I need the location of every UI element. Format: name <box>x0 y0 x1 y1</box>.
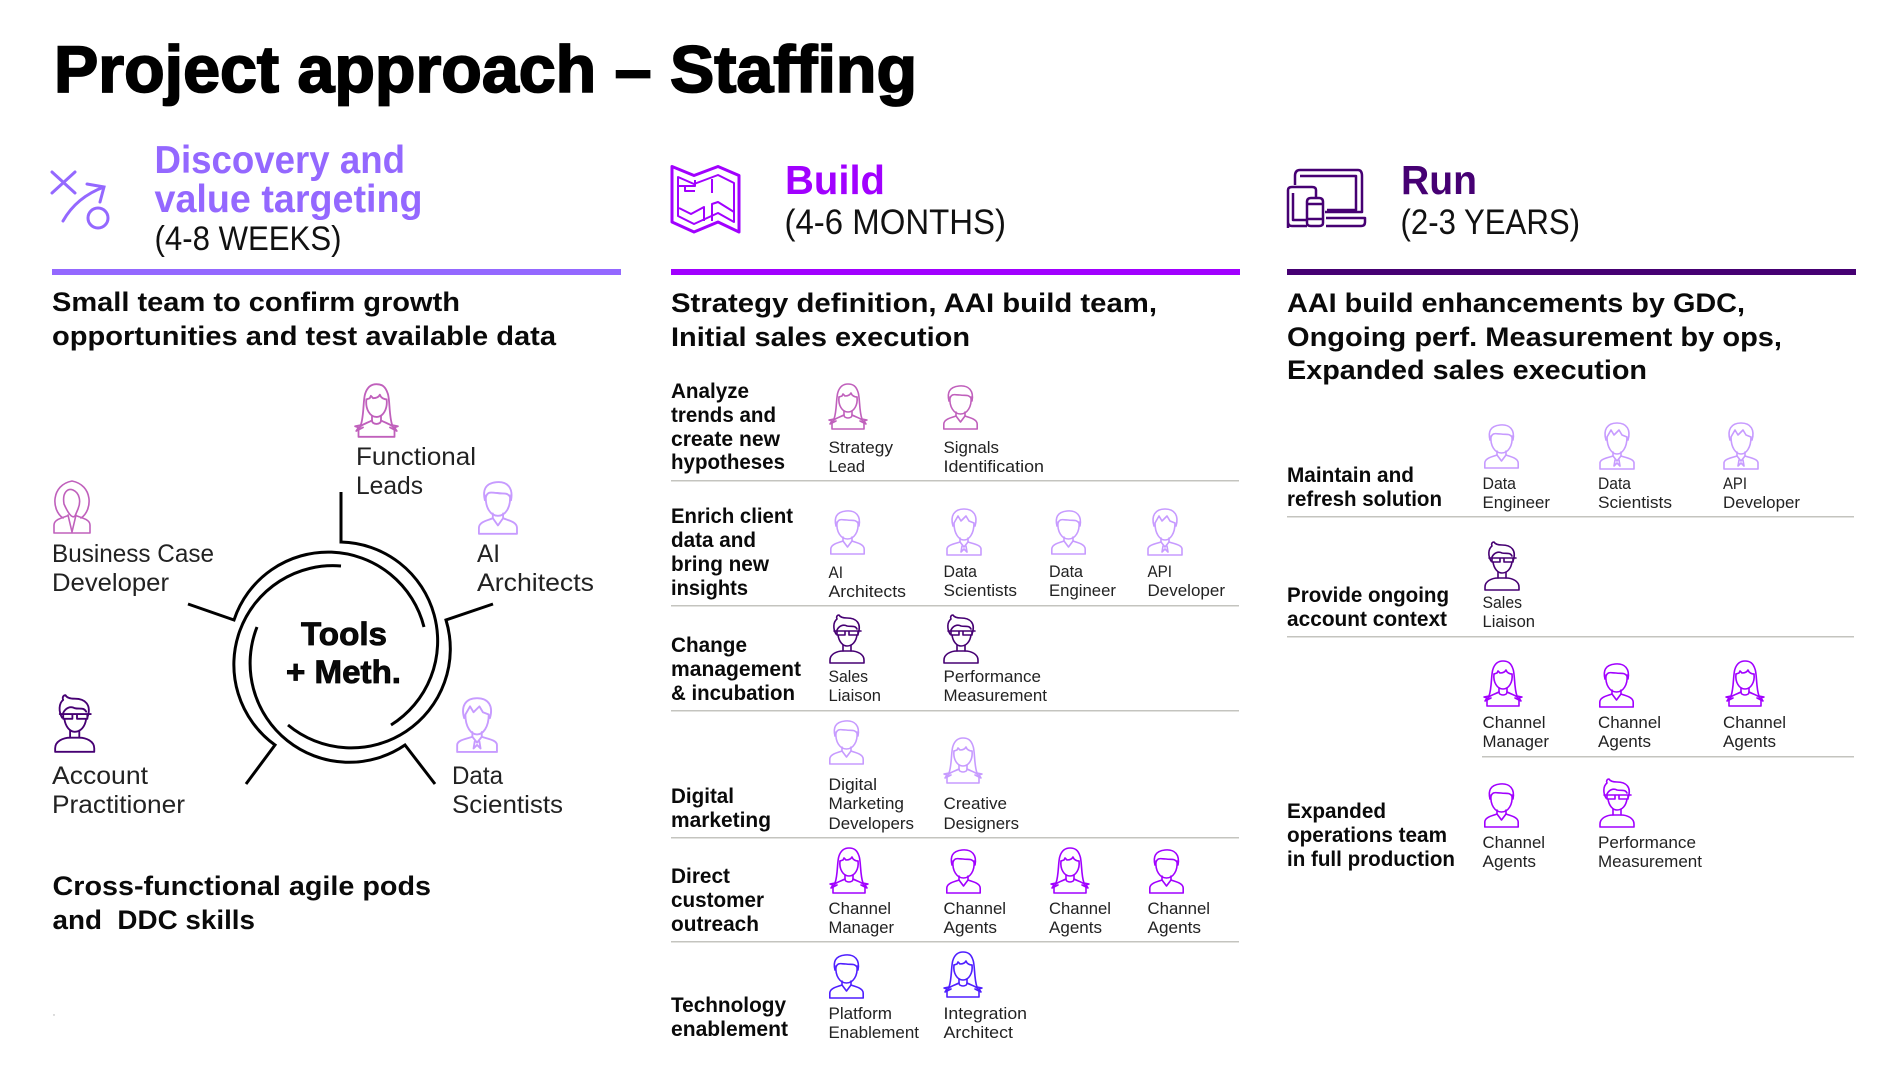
center label: Tools <box>301 616 387 652</box>
row label <box>1287 800 1455 871</box>
icon: play diagram <box>52 172 108 228</box>
role: channel manager <box>828 848 894 937</box>
role: performance measurement: Measurement <box>944 686 1047 705</box>
panel: build <box>671 157 1240 1042</box>
label: Functional <box>356 443 476 471</box>
role: channel agents <box>1598 664 1661 751</box>
row: digital marketing <box>671 721 1019 833</box>
row label: Change <box>671 634 747 657</box>
role: data engineer: Engineer <box>1049 581 1116 600</box>
role: platform enablement: Enablement <box>828 1023 919 1042</box>
role: channel agents: Channel <box>944 899 1006 918</box>
role: channel agents: Agents <box>944 918 997 937</box>
label: AI <box>477 540 500 568</box>
role: channel agents <box>1148 850 1210 937</box>
row label <box>671 785 771 832</box>
role: channel manager: Channel <box>1482 713 1546 732</box>
heading: build: (4-6 MONTHS) <box>784 203 1006 242</box>
row label: Analyze <box>671 380 749 403</box>
role: channel agents: Agents <box>1723 732 1776 751</box>
role: signals identification <box>944 386 1044 476</box>
summary text <box>1287 288 1782 385</box>
role: API developer: Developer <box>1148 581 1225 600</box>
role: API developer <box>1723 423 1800 512</box>
row label: Provide ongoing <box>1287 584 1449 607</box>
role: data scientists <box>452 698 563 819</box>
row label: bring new <box>671 553 770 576</box>
label <box>52 540 214 597</box>
footer text <box>52 871 431 935</box>
row label <box>671 994 788 1041</box>
role: sales liaison: Sales <box>1482 593 1522 612</box>
row label: marketing <box>671 809 771 832</box>
role: digital marketing developers: Marketing <box>828 794 904 813</box>
role: API developer <box>1148 509 1225 600</box>
role: channel agents: Agents <box>1598 732 1651 751</box>
role: functional leads <box>355 384 476 500</box>
icon: man with glasses <box>55 695 94 752</box>
summary text <box>671 288 1157 352</box>
row: analyze trends <box>671 380 1044 476</box>
role: channel agents: Agents <box>1482 852 1536 871</box>
role: strategy lead: Lead <box>828 457 865 476</box>
row label: operations team <box>1287 824 1447 847</box>
row: change management <box>671 615 1047 705</box>
summary text <box>52 287 557 351</box>
summary text: Ongoing perf. Measurement by ops, <box>1287 322 1782 352</box>
role: performance measurement <box>944 615 1047 705</box>
role: sales liaison: Sales <box>828 667 868 686</box>
heading: run: Run <box>1401 157 1477 203</box>
role: integration architect: Integration <box>944 1004 1027 1023</box>
row label <box>1287 584 1449 631</box>
role: integration architect <box>944 952 1027 1042</box>
role: strategy lead <box>828 384 894 476</box>
label: Architects <box>477 569 594 597</box>
role: API developer: API <box>1148 562 1172 581</box>
row label: Digital <box>671 785 734 808</box>
row label <box>1287 464 1442 511</box>
footer text: and DDC skills <box>52 905 255 935</box>
icon: map <box>672 166 739 232</box>
row label: Expanded <box>1287 800 1386 823</box>
row label <box>671 865 764 936</box>
heading: build: Build <box>785 157 885 203</box>
role: business case developer <box>52 481 214 597</box>
role: data scientists: Data <box>944 562 977 581</box>
title: Project approach – Staffing <box>54 32 917 106</box>
summary text: opportunities and test available data <box>52 321 557 351</box>
role: integration architect: Architect <box>944 1023 1013 1042</box>
role: performance measurement: Measurement <box>1598 852 1702 871</box>
icon: woman <box>54 481 90 533</box>
role: channel agents: Channel <box>1723 713 1786 732</box>
row label: data and <box>671 529 756 552</box>
role: platform enablement <box>828 955 919 1042</box>
role: sales liaison: Liaison <box>828 686 881 705</box>
label: Leads <box>356 472 423 500</box>
role: AI architects <box>477 482 594 597</box>
role: channel agents <box>1049 848 1111 937</box>
label <box>452 762 563 819</box>
role: signals identification: Signals <box>944 438 999 457</box>
role: digital marketing developers: Digital <box>828 775 877 794</box>
row label <box>671 505 793 600</box>
role: creative designers <box>944 738 1019 833</box>
role: data engineer: Engineer <box>1482 493 1550 512</box>
heading: discovery <box>154 139 422 258</box>
row: technology enablement <box>671 952 1027 1042</box>
label <box>356 443 476 500</box>
summary text: AAI build enhancements by GDC, <box>1287 288 1745 318</box>
row label: trends and <box>671 404 776 427</box>
row label: outreach <box>671 913 759 936</box>
role: performance measurement: Performance <box>1598 833 1696 852</box>
label: Data <box>452 762 503 790</box>
role: channel agents: Agents <box>1148 918 1201 937</box>
row label: customer <box>671 889 764 912</box>
row: enrich client data <box>671 505 1225 601</box>
role: data engineer: Data <box>1049 562 1084 581</box>
label: Developer <box>52 569 169 597</box>
row: expanded operations <box>1287 661 1786 871</box>
label: Practitioner <box>52 791 185 819</box>
role: signals identification: Identification <box>944 457 1044 476</box>
role: channel manager: Channel <box>828 899 891 918</box>
role: data engineer <box>1482 425 1550 512</box>
row label: Direct <box>671 865 730 888</box>
role: data scientists <box>944 509 1017 600</box>
role: API developer: Developer <box>1723 493 1800 512</box>
role: data scientists: Scientists <box>1598 493 1672 512</box>
icon: devices <box>1288 170 1365 228</box>
center label: + Meth. <box>286 654 401 690</box>
row label: Enrich client <box>671 505 793 528</box>
row: ongoing account context <box>1287 542 1535 631</box>
role: API developer: API <box>1723 474 1747 493</box>
row label <box>671 634 801 705</box>
row label: Maintain and <box>1287 464 1414 487</box>
role: strategy lead: Strategy <box>828 438 894 457</box>
role: platform enablement: Platform <box>828 1004 892 1023</box>
panel: discovery and value targeting <box>52 139 621 935</box>
icon: woman <box>355 384 398 437</box>
row label: & incubation <box>671 682 795 705</box>
role: channel agents <box>1723 661 1786 751</box>
row: direct customer outreach <box>671 848 1210 937</box>
role: channel agents <box>1482 784 1545 871</box>
label <box>52 762 185 819</box>
role: data scientists: Data <box>1598 474 1631 493</box>
role: sales liaison <box>1482 542 1535 631</box>
row: maintain and refresh <box>1287 423 1800 512</box>
role: digital marketing developers <box>828 721 914 833</box>
rule <box>52 269 621 275</box>
icon: man with tie <box>457 698 497 752</box>
label: Account <box>52 762 148 790</box>
role: creative designers: Designers <box>944 814 1019 833</box>
role: AI architects <box>828 511 906 601</box>
role: account practitioner <box>52 695 185 819</box>
row label: management <box>671 658 801 681</box>
row label: refresh solution <box>1287 488 1442 511</box>
role: sales liaison: Liaison <box>1482 612 1535 631</box>
role: data scientists <box>1598 423 1672 512</box>
heading: discovery: Discovery and <box>154 139 405 182</box>
role: performance measurement: Performance <box>944 667 1041 686</box>
heading: discovery: (4-8 WEEKS) <box>154 220 342 258</box>
role: digital marketing developers: Developers <box>828 814 914 833</box>
role: data engineer: Data <box>1482 474 1516 493</box>
role: AI architects: Architects <box>828 582 906 601</box>
role: performance measurement <box>1598 779 1702 871</box>
heading: discovery: value targeting <box>154 178 422 221</box>
row label: hypotheses <box>671 451 785 474</box>
summary text: Small team to confirm growth <box>52 287 460 317</box>
summary text: Initial sales execution <box>671 322 970 352</box>
role: channel agents: Channel <box>1598 713 1661 732</box>
role: channel agents: Channel <box>1148 899 1210 918</box>
role: sales liaison <box>828 615 881 705</box>
row label: in full production <box>1287 848 1455 871</box>
summary text: Strategy definition, AAI build team, <box>671 288 1157 318</box>
role: channel manager: Manager <box>828 918 894 937</box>
row label: insights <box>671 577 748 600</box>
row label: Technology <box>671 994 786 1017</box>
summary text: Expanded sales execution <box>1287 355 1647 385</box>
role: channel manager: Manager <box>1482 732 1549 751</box>
role: AI architects: AI <box>828 563 843 582</box>
rule <box>1287 269 1856 275</box>
role: data engineer <box>1049 511 1116 600</box>
row label: create new <box>671 428 781 451</box>
label: Scientists <box>452 791 563 819</box>
label: Business Case <box>52 540 214 568</box>
role: creative designers: Creative <box>944 794 1007 813</box>
panel: run <box>1287 157 1856 871</box>
row label: account context <box>1287 608 1447 631</box>
role: channel agents <box>944 850 1006 937</box>
label <box>477 540 594 597</box>
role: channel manager <box>1482 661 1549 751</box>
spiral diagram <box>188 492 493 784</box>
heading: build <box>784 157 1006 242</box>
icon: man <box>479 482 517 534</box>
rule <box>671 269 1240 275</box>
role: channel agents: Channel <box>1482 833 1545 852</box>
role: data scientists: Scientists <box>944 581 1017 600</box>
role: channel agents: Agents <box>1049 918 1102 937</box>
row label <box>671 380 785 474</box>
footer text: Cross-functional agile pods <box>52 871 431 901</box>
row label: enablement <box>671 1018 788 1041</box>
heading: run: (2-3 YEARS) <box>1400 203 1580 242</box>
role: channel agents: Channel <box>1049 899 1111 918</box>
heading: run <box>1400 157 1580 242</box>
center label <box>286 616 401 690</box>
